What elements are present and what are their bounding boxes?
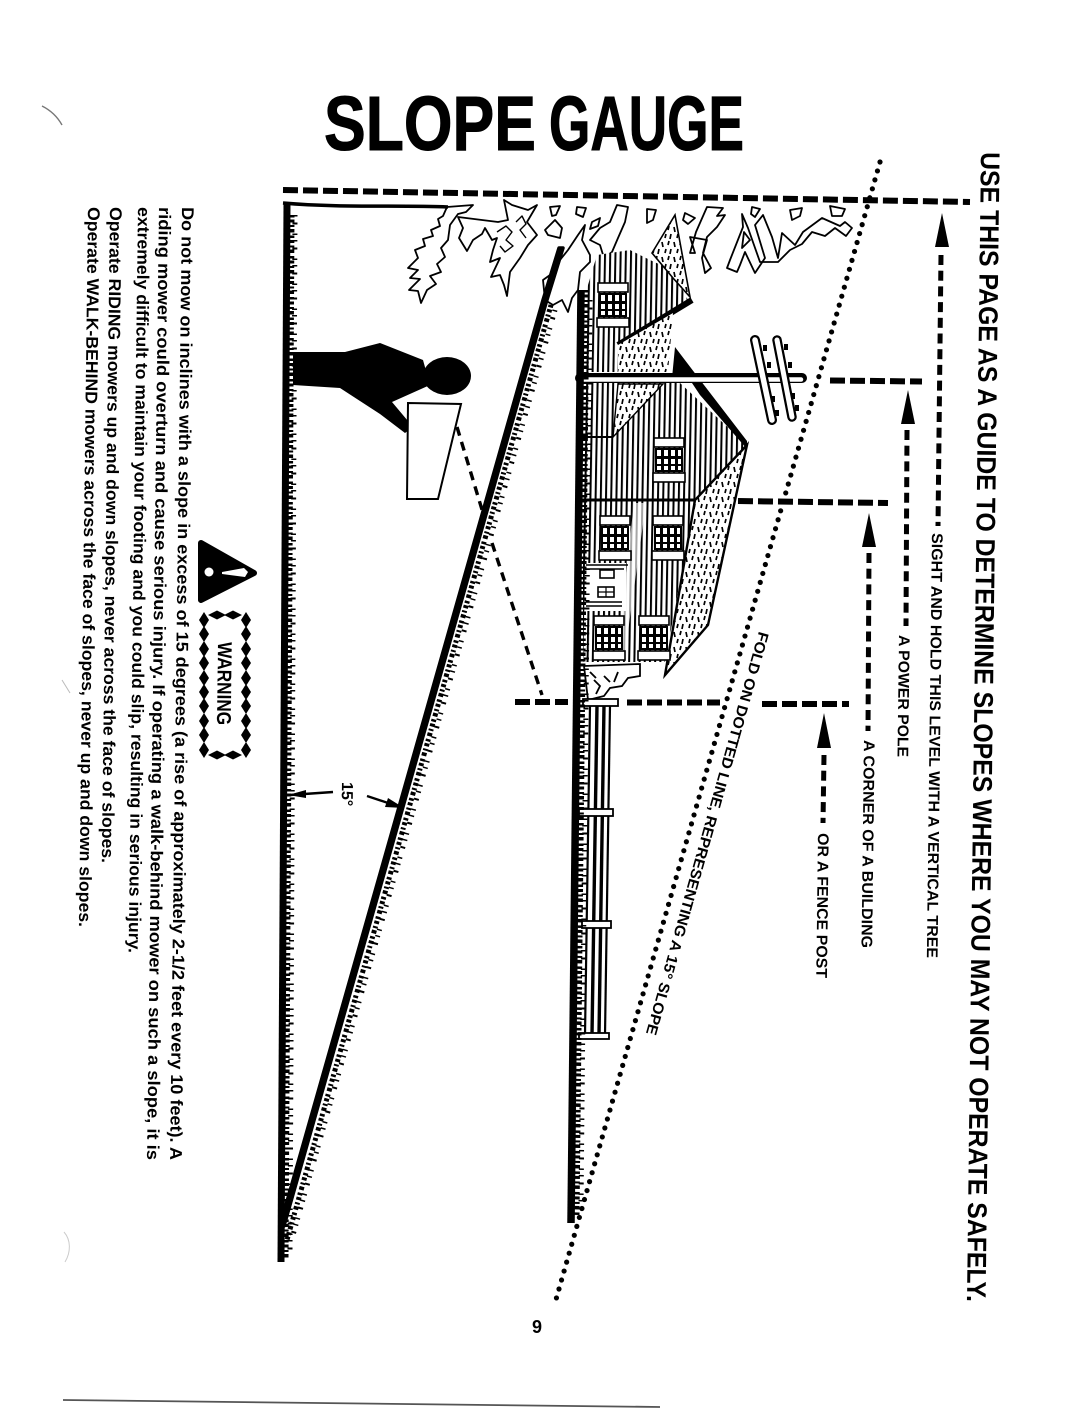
lower wing roof	[618, 313, 673, 372]
left ground line	[281, 203, 448, 1262]
wing roof edge	[618, 300, 692, 345]
heading: use this page as a guide: USE THIS PAGE AS A GUIDE TO DETERMINE SLOPES WHERE YOU MAY NOT OPERATE SAFELY.	[961, 152, 1005, 1302]
tree foliage	[408, 200, 852, 312]
house	[582, 215, 747, 700]
warning body text: Operate RIDING mowers up and down slopes, never across the face of slopes.	[98, 207, 125, 863]
15 degree angle label: 15°	[338, 782, 355, 806]
fence	[579, 699, 618, 1039]
silhouette of person	[293, 343, 471, 433]
dotted fold line	[555, 162, 880, 1303]
power pole	[580, 340, 802, 420]
wing roof below pole	[613, 384, 663, 437]
fence post arrow and label: OR A FENCE POST	[812, 833, 831, 979]
bottom scan edge line	[63, 1400, 660, 1407]
fence post arrow and label	[515, 702, 849, 979]
warning body text	[75, 207, 197, 1160]
warning label	[199, 610, 251, 760]
title: SLOPE	[324, 81, 536, 167]
left wing wall	[585, 250, 688, 372]
upper wing roof	[652, 215, 690, 297]
warning body text: riding mower could overturn and cause serious injury. If operating a walk-behind mower on such a slope, it is	[143, 207, 174, 1160]
fold line label: FOLD ON DOTTED LINE, REPRESENTING A 15° SLOPE	[642, 630, 772, 1037]
warning body text: Do not mow on inclines with a slope in excess of 15 degrees (a rise of approximately 2-1/2 feet every 10 feet). A	[166, 207, 197, 1160]
warning body text: extremely difficult to maintain your footing and you could slip, resulting in serious injury.	[125, 207, 153, 953]
building corner arrow and label: A CORNER OF A BUILDING	[857, 740, 877, 948]
dashed level line: top of tree	[283, 190, 970, 202]
page number: 9	[532, 1317, 542, 1337]
power pole arrow and label: A POWER POLE	[894, 635, 912, 757]
warning label: WARNING	[212, 642, 235, 725]
window d	[638, 616, 670, 660]
house ground line	[571, 290, 590, 1223]
main wall upper	[583, 383, 747, 500]
main roof	[665, 445, 747, 675]
scan specks	[42, 106, 70, 1262]
title	[324, 81, 744, 167]
tree sight arrow and label: SIGHT AND HOLD THIS LEVEL WITH A VERTICAL TREE	[923, 533, 945, 958]
porch	[586, 563, 628, 611]
dashed sight lines	[457, 427, 542, 695]
15 degree angle label	[288, 782, 404, 808]
wall rule	[582, 498, 695, 502]
window upper	[653, 438, 685, 482]
main roof ridge	[672, 347, 747, 449]
bush	[584, 664, 640, 700]
window wing	[597, 283, 629, 327]
building corner arrow and label	[738, 501, 888, 948]
title: GAUGE	[549, 81, 744, 167]
main wall lower	[583, 500, 695, 662]
window a	[599, 516, 631, 560]
folded gauge page held by person	[407, 403, 461, 499]
white band on wall	[616, 503, 646, 660]
wing rule	[583, 436, 613, 438]
window c	[593, 616, 625, 660]
tree sight arrow and label	[923, 213, 949, 958]
15 degree slope ground line	[280, 248, 563, 1240]
warning triangle icon	[201, 543, 254, 600]
warning body text: Operate WALK-BEHIND mowers across the face of slopes, never up and down slopes.	[75, 207, 103, 927]
power pole arrow and label	[830, 380, 922, 757]
window b	[652, 516, 684, 560]
